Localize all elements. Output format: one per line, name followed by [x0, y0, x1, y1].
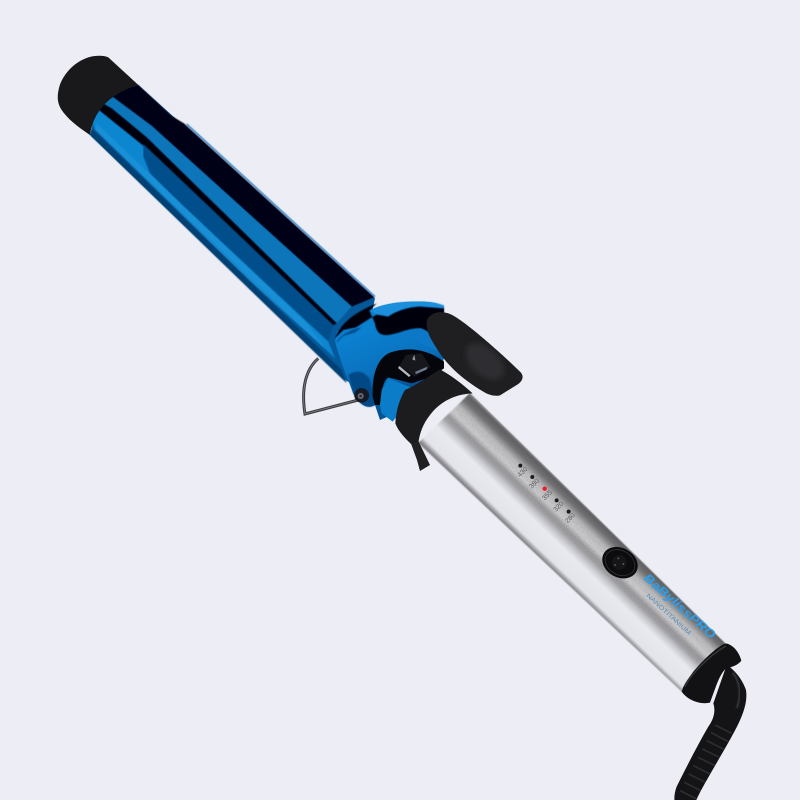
- deep blue band: [143, 144, 333, 342]
- upper arch highlight: [370, 302, 444, 317]
- stand screw: [354, 388, 369, 403]
- temperature labels: 280: [564, 512, 577, 525]
- lower dark edge: [90, 129, 347, 383]
- lower blue panel: [380, 378, 411, 422]
- shaded lower body: [348, 372, 375, 407]
- temperature indicator: [516, 464, 577, 525]
- lighter stripe: [95, 123, 327, 350]
- blue reflection band: [103, 95, 352, 323]
- barrel: [90, 85, 375, 387]
- wire stand: [304, 358, 358, 414]
- cord highlight: [733, 673, 740, 708]
- end ring: [682, 643, 741, 703]
- collar fin: [411, 442, 430, 471]
- silver handle: [418, 390, 730, 692]
- end collar and power cord: [674, 643, 746, 800]
- black reflection band: [110, 85, 374, 307]
- black collar: [395, 369, 473, 471]
- thin black line: [99, 103, 337, 327]
- black reflection: [335, 303, 444, 347]
- temperature labels: 380: [528, 477, 541, 490]
- hinge arch shadow: [373, 349, 444, 405]
- brand logo: BaBylissPRO: [641, 571, 719, 642]
- body reflection patch: [336, 327, 362, 343]
- clamp body: [335, 302, 444, 422]
- temperature labels: 430: [516, 466, 529, 479]
- hinge metal: [398, 353, 431, 377]
- blue reflection inside black: [410, 328, 444, 353]
- temperature labels: [516, 466, 577, 525]
- brushed grain: [451, 405, 715, 666]
- product name: NANOTITANIUM: [645, 593, 691, 637]
- cord ribs: [680, 725, 732, 799]
- cord: [674, 665, 746, 800]
- bright blue band: [92, 111, 335, 358]
- power button: [596, 541, 643, 585]
- blue body: [335, 302, 444, 420]
- indicator lights: [518, 464, 571, 514]
- barrel base: [90, 85, 375, 387]
- upper blue fringe: [187, 124, 375, 297]
- barrel tip cap: [58, 56, 138, 135]
- temperature labels: 320: [552, 500, 565, 513]
- thumb lever pad: [427, 312, 523, 396]
- temperature labels: 355: [541, 489, 554, 502]
